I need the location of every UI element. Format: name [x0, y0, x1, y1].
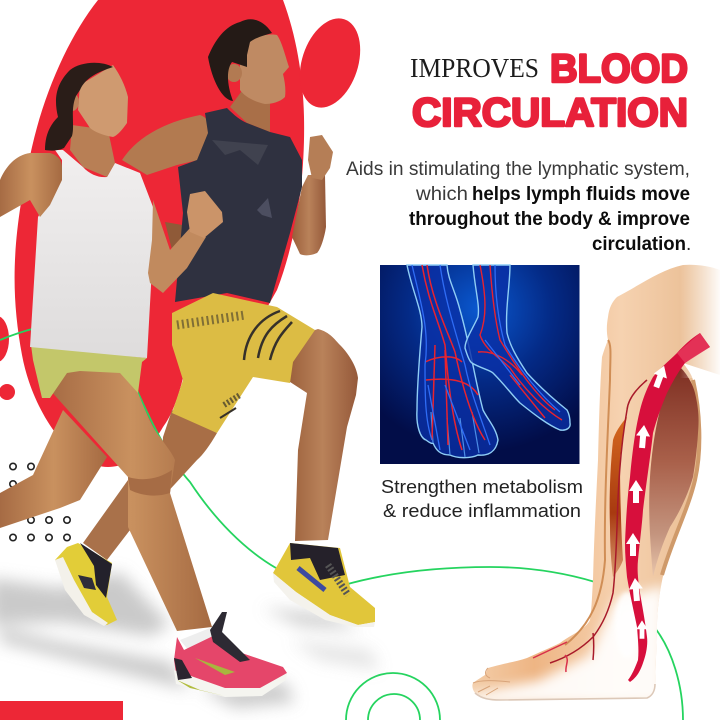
man right arm [292, 175, 326, 255]
man ear [226, 64, 242, 82]
woman knee shading [128, 470, 172, 496]
description text block: circulation [592, 234, 686, 255]
description text block: . [686, 234, 691, 255]
panel: blue foot x-ray image [380, 265, 580, 464]
image caption [381, 476, 583, 521]
foot lower edge shading [475, 684, 655, 700]
red half circle at left edge [0, 316, 9, 362]
dot grid decoration [10, 463, 70, 541]
woman white tank top [30, 150, 153, 358]
right foot [465, 265, 570, 430]
woman left arm [0, 153, 62, 217]
runner: woman [0, 63, 287, 697]
description text block: which [415, 184, 468, 205]
thigh fade [680, 262, 720, 378]
anatomical leg illustration [468, 262, 720, 705]
red bar bottom left [0, 701, 123, 720]
achilles bump [615, 592, 639, 658]
calf muscle [649, 367, 699, 577]
heading word: circulation: CIRCULATION [412, 91, 688, 135]
man back thigh and knee [160, 410, 217, 500]
woman front leg [50, 366, 212, 631]
orange shin muscle [610, 417, 627, 577]
description text block: Aids in stimulating the lymphatic system, [346, 159, 690, 180]
main red artery [625, 333, 710, 682]
man face [240, 34, 289, 104]
man hair [208, 19, 272, 101]
woman pink shoe [174, 612, 287, 697]
toes [473, 668, 510, 695]
woman ear [65, 93, 79, 111]
woman back leg [0, 410, 107, 528]
woman hair [45, 63, 113, 151]
image caption: Strengthen metabolism [381, 476, 583, 497]
description text block [346, 159, 691, 255]
man shin behind knee [83, 480, 170, 560]
man elbow behind hand [165, 222, 206, 254]
woman face [78, 65, 128, 137]
woman shorts [31, 345, 147, 398]
description text block: throughout the body & improve [409, 209, 690, 230]
red dot [0, 384, 15, 400]
green line decoration [0, 328, 683, 720]
ground shadows [0, 572, 380, 708]
man dark tank top [175, 108, 302, 303]
man back shoe [55, 543, 117, 626]
man right shoe [273, 543, 375, 627]
woman neck [70, 125, 115, 177]
man shirt highlights [212, 140, 268, 165]
heading word: improves: IMPROVES [410, 53, 539, 83]
shin edge line [565, 340, 610, 645]
back of calf edge [662, 380, 699, 575]
man neck [230, 88, 270, 132]
description text block: helps lymph fluids move [472, 184, 690, 205]
leg outline [472, 265, 720, 700]
left foot [407, 265, 498, 458]
man back arm [122, 115, 210, 175]
background red blob [15, 0, 371, 467]
heading [410, 47, 688, 135]
woman fist [187, 191, 223, 238]
man fist [308, 135, 333, 180]
woman right arm [148, 200, 206, 293]
heading word: blood: BLOOD [550, 47, 688, 91]
runner: man [55, 19, 375, 627]
thin vessels [533, 380, 647, 672]
man yellow compression shorts [172, 293, 315, 433]
upper artery highlight [677, 333, 710, 363]
woman front sock [180, 628, 216, 652]
shorts pattern [177, 311, 292, 418]
flow arrows [626, 363, 671, 639]
image caption: & reduce inflammation [383, 500, 581, 521]
foot pale overlay [468, 585, 665, 705]
man front leg [287, 329, 358, 541]
